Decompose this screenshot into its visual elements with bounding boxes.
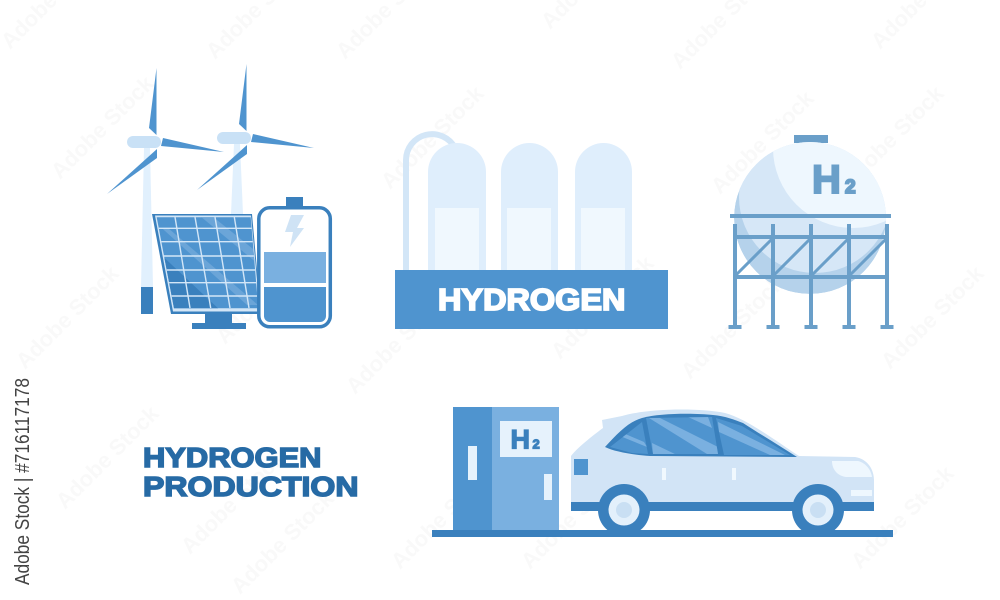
hydrogen pump: 2 [532,436,540,452]
watermark pattern: Adobe Stock [176,445,289,559]
tank cap [794,135,828,143]
support frame [728,214,894,329]
rear lamp [574,459,588,475]
panel: spherical storage tank [728,135,894,329]
heading: hydrogen production: PRODUCTION [143,471,358,502]
door handles [662,468,666,480]
fog lamp [851,490,872,496]
watermark pattern: Adobe Stock [846,460,959,574]
solar panel [150,214,265,329]
heading: hydrogen production [143,442,358,502]
car [571,410,874,536]
watermark pattern: Adobe Stock [226,485,339,599]
watermark pattern: Adobe Stock [211,235,324,349]
panel: hydrogen tanks [395,134,668,329]
infographic canvas [14,64,894,585]
battery [259,197,330,327]
watermark pattern: Adobe Stock [46,70,159,184]
watermark pattern: Adobe Stock [836,80,949,194]
front wheel [792,484,844,536]
hydrogen pump: H [510,424,530,454]
watermark pattern: Adobe Stock [676,270,789,384]
ground line [432,530,893,537]
wind turbine front [107,68,224,314]
watermark id text: Adobe Stock | #716117178 [12,378,34,585]
pipe [406,134,455,272]
panel: renewable energy [107,64,330,329]
heading: hydrogen production: HYDROGEN [143,442,322,473]
watermark pattern: Adobe Stock [706,85,819,199]
tank 2 [501,143,558,271]
watermark pattern: Adobe Stock [11,260,124,374]
sphere [734,142,886,294]
watermark pattern: Adobe Stock [376,80,489,194]
watermark pattern: Adobe Stock [386,460,499,574]
wind turbine back [197,64,314,214]
watermark pattern: Adobe Stock [341,285,454,399]
hydrogen sign [395,270,668,329]
sill [571,502,874,511]
hydrogen pump [453,407,559,531]
watermark pattern: Adobe Stock [546,250,659,364]
tank 1 [428,143,486,271]
tank 3 [575,143,632,271]
windows [600,414,799,460]
H2 label: H [812,158,841,202]
rear wheel [598,484,650,536]
watermark pattern: Adobe Stock [876,260,989,374]
hydrogen sign: HYDROGEN [438,282,626,317]
icon: lightning bolt [285,215,304,247]
watermark pattern: Adobe Stock [516,460,629,574]
panel: refuelling station and car [432,407,893,537]
H2 label: 2 [845,177,856,198]
car body [571,410,874,503]
watermark pattern: Adobe Stock [51,400,164,514]
headlight [832,461,872,477]
